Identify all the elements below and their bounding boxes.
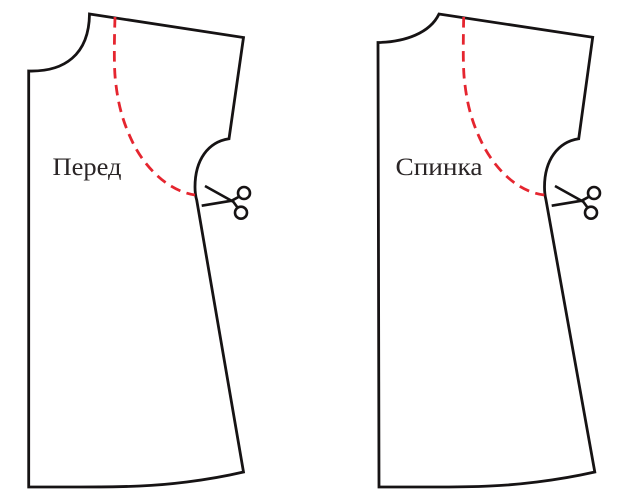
- back outline: [378, 14, 595, 487]
- icon: scissors front: [202, 186, 250, 219]
- back label: Спинка: [396, 152, 482, 181]
- front red dashed cut line: [114, 17, 195, 195]
- panel: front pattern piece: [29, 14, 250, 487]
- icon: scissors back: [552, 186, 600, 219]
- back red dashed cut line: [463, 17, 544, 195]
- panel: back pattern piece: [378, 14, 600, 487]
- front outline: [29, 14, 244, 487]
- front label: Перед: [52, 152, 122, 181]
